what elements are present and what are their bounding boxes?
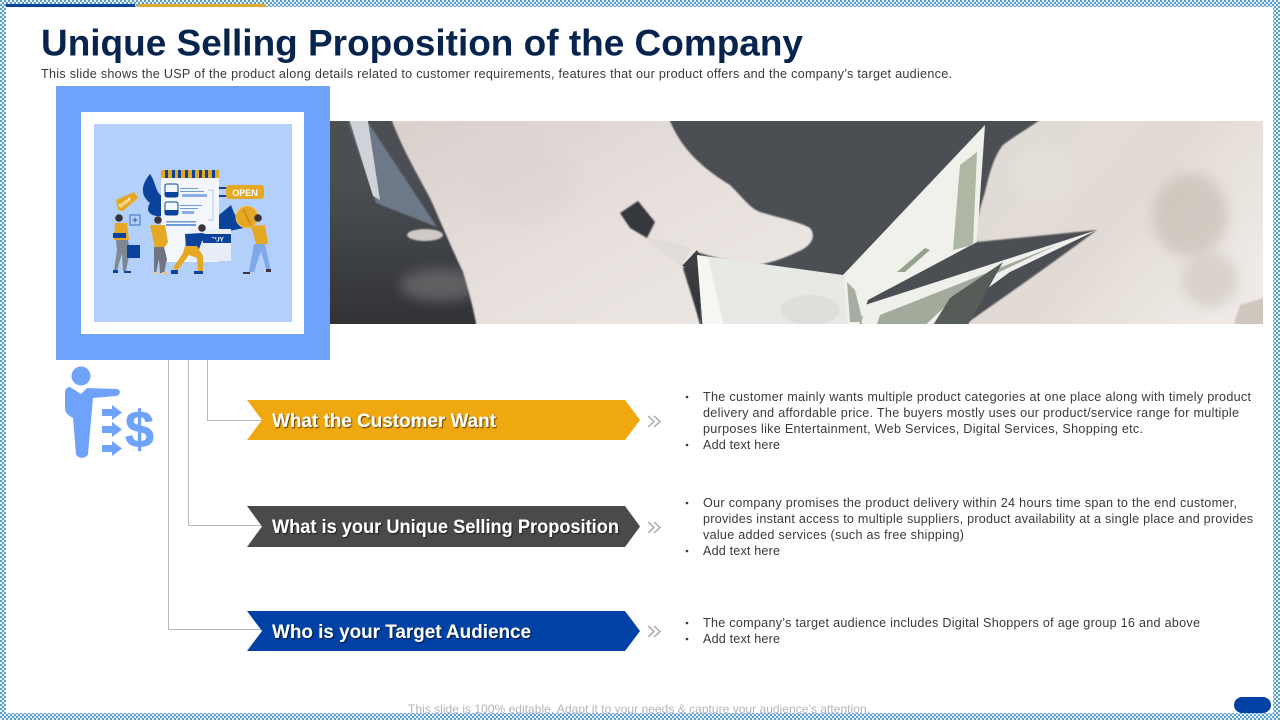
illustration: online shopping store: BUY (210, 236, 225, 244)
banner: target audience (247, 611, 640, 651)
illustration: online shopping store: OPEN (232, 188, 258, 198)
banner: unique selling proposition: What is your Unique Selling Proposition (272, 517, 619, 538)
text block: customer want (686, 390, 1252, 452)
text block: unique selling proposition: provides instant access to multiple suppliers, product availability at a single place and provides (703, 512, 1253, 526)
page number pill (1234, 697, 1271, 713)
illustration: online shopping store: SHOP (118, 196, 133, 210)
connector lines (168, 360, 262, 630)
text block: unique selling proposition: value added services (such as free shipping) (703, 528, 964, 542)
illustration: online shopping store (113, 170, 271, 274)
subtitle: This slide shows the USP of the product along details related to customer requirements, features that our product offers and the company’s target audience. (41, 67, 952, 81)
icon: person with arrows and dollar sign: $ (125, 401, 154, 459)
text block: target audience: The company’s target audience includes Digital Shoppers of age group 16 and above (703, 616, 1200, 630)
top accent bars (6, 4, 266, 7)
icon: double chevrons (648, 416, 660, 637)
text block: customer want: purposes like Entertainment, Web Services, Digital Services, Shopping etc. (703, 422, 1143, 436)
photo: hands counting dollar bills (330, 121, 1263, 324)
text block: unique selling proposition (686, 496, 1253, 558)
banner: target audience: Who is your Target Audience (272, 622, 531, 643)
title: Unique Selling Proposition of the Company (41, 22, 803, 64)
panel: illustration frame (56, 86, 330, 360)
banner: unique selling proposition (247, 506, 640, 547)
text block: target audience (686, 616, 1200, 646)
icon: person with arrows and dollar sign (65, 366, 154, 459)
text block: unique selling proposition: Add text here (703, 544, 780, 558)
footer note: This slide is 100% editable. Adapt it to your needs & capture your audience’s attention. (408, 702, 870, 716)
banner: what the customer want: What the Customer Want (272, 411, 497, 432)
banner: what the customer want (247, 400, 640, 440)
text block: customer want: The customer mainly wants multiple product categories at one place along with timely product (703, 390, 1252, 404)
text block: customer want: Add text here (703, 438, 780, 452)
text block: target audience: Add text here (703, 632, 780, 646)
text block: unique selling proposition: Our company promises the product delivery within 24 hours time span to the end customer, (703, 496, 1237, 510)
text block: customer want: delivery and affordable price. The buyers mostly uses our product/service range for multiple (703, 406, 1239, 420)
